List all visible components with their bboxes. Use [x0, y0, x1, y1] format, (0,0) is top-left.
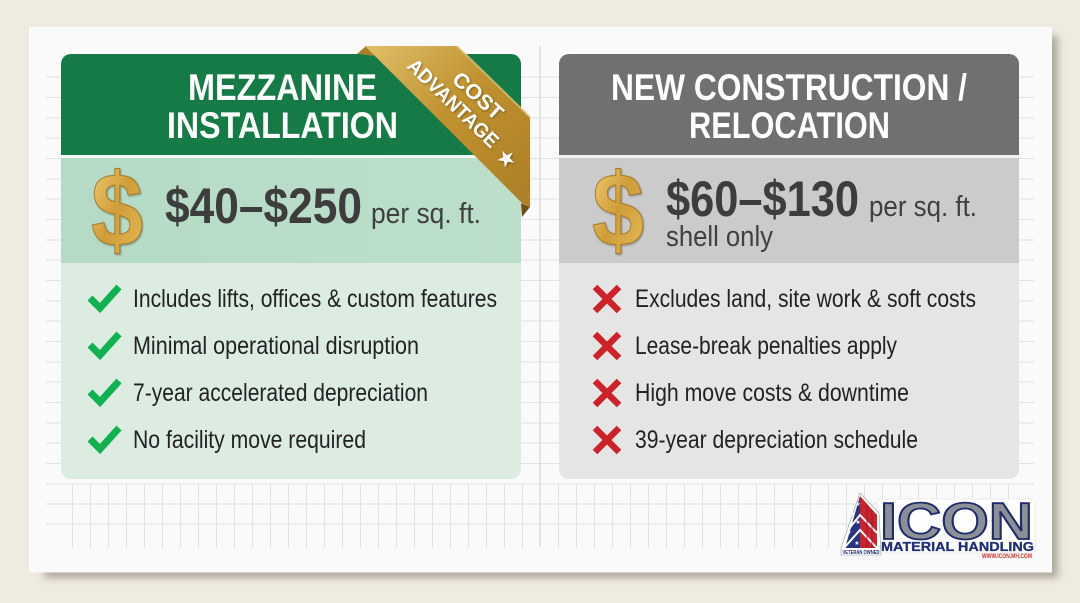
- panel background: [559, 155, 1019, 479]
- price band: [559, 158, 1019, 263]
- price: per sq. ft.: [869, 191, 977, 223]
- drawback 4: 39-year depreciation schedule: [635, 426, 918, 454]
- header band: [61, 54, 521, 155]
- ribbon: cost advantage: [357, 46, 530, 217]
- ribbon: cost advantage: ★: [492, 146, 519, 173]
- price: $60–$130: [666, 171, 859, 227]
- drawback 2: Lease-break penalties apply: [635, 332, 897, 360]
- panel: new construction / relocation: [559, 54, 1019, 479]
- price band: [61, 158, 521, 263]
- logo: ICON Material Handling: MATERIAL HANDLING: [881, 539, 1034, 554]
- logo: ICON Material Handling: WWW.ICON.MH.COM: [982, 553, 1032, 560]
- price: shell only: [666, 221, 773, 253]
- drawback 1: Excludes land, site work & soft costs: [635, 285, 976, 313]
- ribbon: cost advantage: ADVANTAGE: [403, 55, 503, 153]
- drawback 3: High move costs & downtime: [635, 379, 909, 407]
- price: [666, 171, 977, 253]
- price: $40–$250: [165, 178, 362, 234]
- logo emblem: ★: [849, 511, 855, 518]
- logo emblem: ★: [855, 501, 861, 508]
- drawbacks list: [595, 285, 976, 454]
- benefit 1: Includes lifts, offices & custom features: [133, 285, 497, 313]
- heading: INSTALLATION: [167, 105, 398, 146]
- icon: gold dollar sign: $: [91, 151, 143, 268]
- benefits list: [90, 285, 497, 454]
- logo: ICON Material Handling: [841, 493, 1035, 560]
- panel: mezzanine installation: [61, 54, 521, 479]
- benefit 2: Minimal operational disruption: [133, 332, 419, 360]
- heading: [611, 67, 967, 146]
- benefit 3: 7-year accelerated depreciation: [133, 379, 428, 407]
- heading: RELOCATION: [689, 105, 890, 146]
- panel background: [61, 155, 521, 479]
- logo emblem: VETERAN OWNED: [842, 550, 880, 556]
- logo emblem: ★: [855, 519, 861, 526]
- logo emblem: [841, 493, 881, 556]
- heading: [167, 67, 398, 146]
- price: per sq. ft.: [371, 198, 481, 230]
- logo wordmark: ICON: [880, 493, 1033, 551]
- benefit 4: No facility move required: [133, 426, 366, 454]
- logo emblem: ★: [854, 540, 860, 547]
- ribbon: cost advantage: COST: [448, 68, 508, 125]
- heading: MEZZANINE: [188, 67, 377, 108]
- logo emblem: ★: [846, 529, 852, 536]
- header band: [559, 54, 1019, 155]
- icon: gold dollar sign: $: [592, 151, 644, 268]
- heading: NEW CONSTRUCTION /: [611, 67, 967, 108]
